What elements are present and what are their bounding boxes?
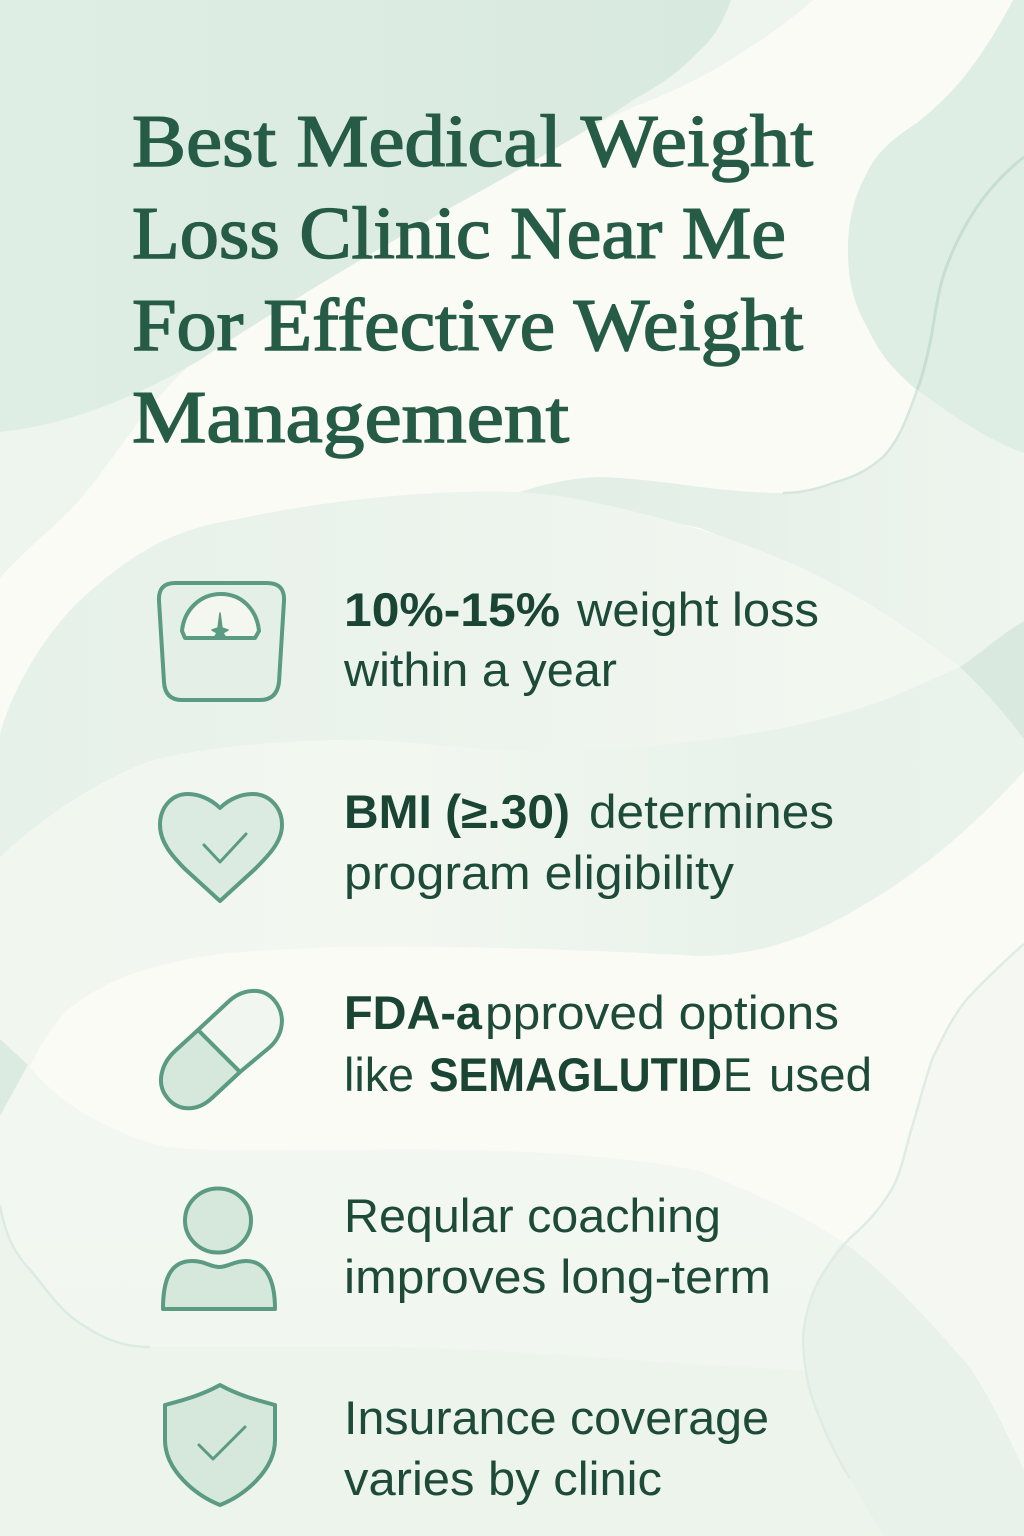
text: coaching: [344, 1189, 771, 1303]
text: weight loss: 10%-15%: [344, 583, 560, 636]
item 1: weight loss: [159, 583, 819, 700]
text: FDA-approved: pproved options: [485, 986, 839, 1039]
title: For Effective Weight: [132, 285, 803, 367]
icon: weighing scale: [159, 583, 284, 700]
text: FDA-approved: E: [723, 1048, 752, 1101]
text: insurance: [344, 1391, 769, 1505]
text: insurance: varies by clinic: [344, 1452, 662, 1505]
text: FDA-approved: like: [344, 1048, 414, 1101]
text: BMI: [344, 785, 834, 899]
text: weight loss: [343, 583, 819, 696]
item 5: insurance: [165, 1385, 769, 1505]
item 2: BMI: [160, 785, 834, 901]
text: BMI: determines: [589, 785, 834, 838]
text: FDA-approved: [344, 986, 872, 1101]
text: BMI: program eligibility: [344, 846, 735, 899]
item 4: coaching: [163, 1188, 771, 1309]
text: FDA-approved: SEMAGLUTID: [429, 1048, 722, 1101]
text: insurance: Insurance coverage: [344, 1391, 769, 1444]
icon: shield with check: [165, 1385, 275, 1505]
text: weight loss: within a year: [343, 643, 617, 696]
title: Management: [132, 377, 569, 459]
text: coaching: improves long-term: [344, 1250, 771, 1303]
text: coaching: Reqular coaching: [344, 1189, 721, 1242]
text: BMI: BMI (≥.30): [344, 785, 570, 838]
title: Loss Clinic Near Me: [132, 193, 786, 275]
text: weight loss: weight loss: [576, 583, 819, 636]
title: [132, 101, 813, 459]
item 3: FDA-approved: [161, 986, 872, 1108]
icon: person: [163, 1188, 275, 1309]
title: Best Medical Weight: [132, 101, 813, 183]
icon: heart with check: [160, 794, 282, 901]
icon: capsule: [161, 991, 282, 1108]
text: FDA-approved: used: [769, 1048, 872, 1101]
text: FDA-approved: FDA-a: [344, 986, 483, 1039]
